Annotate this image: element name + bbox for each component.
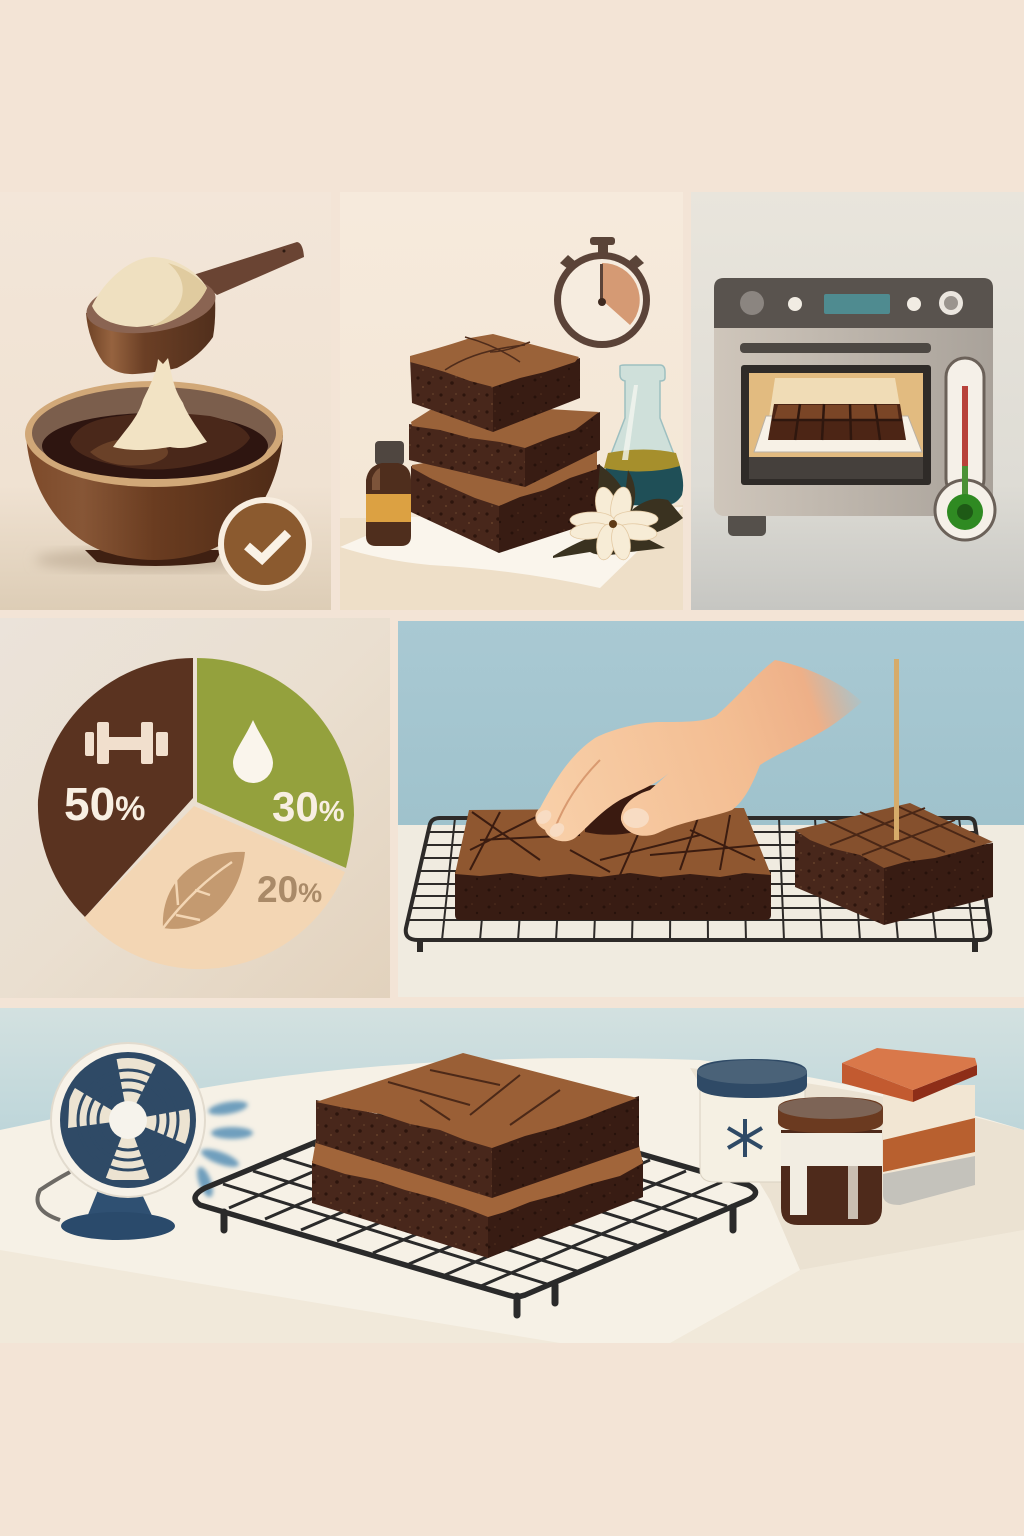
icon: snowflake jar xyxy=(697,1059,807,1182)
icon: dumbbell xyxy=(85,722,168,764)
icon: cooling rack xyxy=(195,1095,756,1315)
icon: stopwatch xyxy=(554,237,650,348)
label: 30%: 30% xyxy=(272,783,345,830)
icon: stacked brownies xyxy=(312,1053,643,1258)
icon: mixing bowl xyxy=(25,381,283,572)
label: 20%: 20% xyxy=(257,869,322,910)
icon: fan xyxy=(38,1043,205,1240)
icon: water drop xyxy=(233,720,273,783)
icon: scoop with flour xyxy=(83,242,304,450)
icon: leaf xyxy=(160,852,245,932)
icon: air lines xyxy=(194,1099,253,1199)
icon: bottle xyxy=(366,441,411,546)
icon: small brownie xyxy=(795,803,993,925)
icon: vanilla flower xyxy=(553,465,683,561)
panel: brownie stack and vanilla xyxy=(340,192,683,610)
icon: oven xyxy=(714,278,995,540)
icon: cooling rack xyxy=(406,818,990,952)
tablecloth xyxy=(0,1058,1024,1343)
panel: measuring flour into bowl xyxy=(0,192,331,610)
icon: square tin xyxy=(842,1048,977,1205)
pie chart xyxy=(38,658,354,969)
flour stream xyxy=(113,358,207,450)
icon: toothpick xyxy=(894,659,899,840)
panel: oven with thermometer xyxy=(691,192,1024,610)
panel: testing brownie doneness xyxy=(398,621,1024,997)
icon: brownie middle xyxy=(409,405,600,487)
icon: check badge xyxy=(218,497,312,591)
icon: hand xyxy=(534,660,862,841)
icon: thermometer xyxy=(935,358,995,540)
icon: chocolate jar xyxy=(778,1097,883,1225)
label: 50%: 50% xyxy=(64,778,145,830)
panel: cooling and storage xyxy=(0,1008,1024,1343)
panel: macro pie chart xyxy=(0,618,390,998)
paper sheet xyxy=(340,507,683,588)
icon: brownie bottom xyxy=(411,438,600,553)
icon: large brownie xyxy=(455,808,771,920)
icon: brownie top xyxy=(410,334,580,432)
icon: flask xyxy=(604,365,683,505)
table surface behind jars xyxy=(690,1068,1024,1270)
